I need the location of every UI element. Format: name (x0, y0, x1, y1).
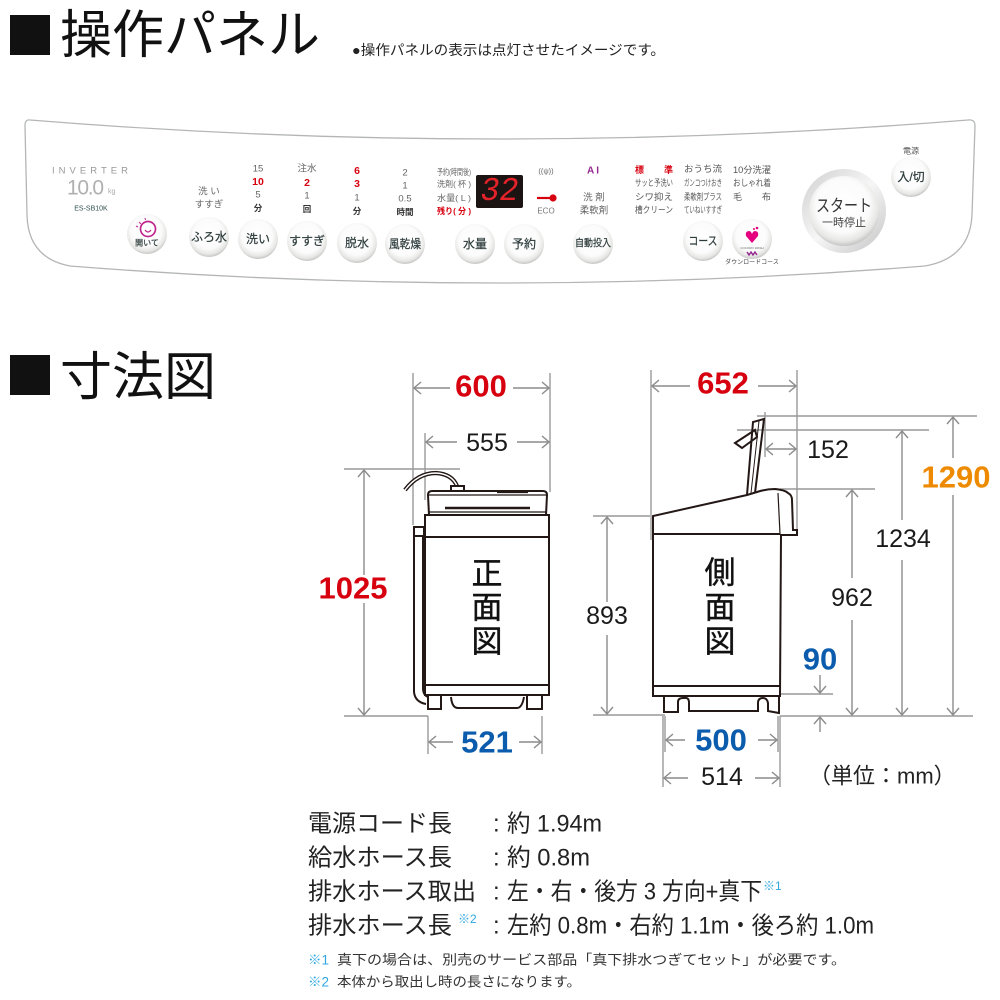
icon: wifi and eco key: ECO (537, 206, 555, 216)
spec: drain outlet: 排水ホース取出 (308, 878, 476, 906)
icon: wifi and eco key (537, 166, 557, 216)
button: コース (683, 221, 723, 261)
footnote 2: ※2 (308, 974, 329, 990)
button: download course (725, 219, 779, 266)
dimension: 521 (428, 716, 542, 760)
dimension: 652 (651, 366, 797, 540)
wash labels column: 10 (252, 176, 264, 188)
dimension: 1234: 1234 (875, 525, 931, 553)
wash labels column: 15 (253, 164, 263, 174)
model info (52, 166, 128, 212)
dimension: 1025: 1025 (319, 570, 387, 606)
button: 予約 (504, 224, 544, 264)
dimension: 555 (425, 429, 549, 500)
button: 開いて: 開いて (135, 238, 159, 248)
diagram: side view (586, 366, 990, 791)
button: 自動投入 (573, 224, 613, 264)
washer front drawing: 図 (472, 624, 502, 660)
wash labels column: 1 (402, 180, 408, 192)
button: 電源 入/切: 入/切 (897, 170, 925, 184)
diagram: front view (319, 368, 550, 760)
button: 風乾燥: 風乾燥 (389, 237, 421, 251)
display labels: 予約(時間後) (437, 167, 471, 177)
dimension: 500 (665, 716, 778, 758)
note: panel display: ●操作パネルの表示は点灯させたイメージです。 (352, 42, 665, 58)
spec: drain outlet: ※1 (763, 879, 782, 893)
spec: water hose: 約 0.8m (507, 844, 590, 872)
course labels: シワ抑え (635, 191, 673, 202)
button: 洗い: 洗い (246, 232, 270, 246)
button: スタート: 一時停止 (822, 216, 866, 229)
course labels: 槽クリーン (635, 204, 673, 215)
wash labels column: 回 (303, 204, 311, 214)
AI labels (580, 166, 608, 216)
spec: drain outlet: : (493, 878, 500, 906)
dimension: 90 (780, 642, 837, 732)
washer front drawing (405, 473, 549, 709)
wash labels column: 5 (255, 190, 261, 200)
button: download course: ダウンロードコース (725, 258, 779, 266)
spec: power cord: : (493, 810, 500, 838)
button: 脱水 (337, 223, 377, 263)
spec: drain outlet (308, 878, 782, 906)
wash labels column: 3 (354, 178, 360, 190)
dimension: 90: 90 (803, 642, 837, 676)
dimension: 893: 893 (586, 602, 628, 630)
dimension: 893 (586, 516, 665, 715)
wash labels column: 2 (304, 177, 310, 189)
footnote 2: 本体から取出し時の長さになります。 (337, 974, 581, 990)
display labels (437, 167, 471, 216)
spec: power cord (308, 810, 602, 838)
button: download course: COCORO WASH (740, 246, 764, 250)
washer front drawing: 正 (472, 556, 502, 592)
washer side drawing: 図 (704, 624, 736, 660)
washer front drawing: 面 (472, 590, 502, 626)
wash labels column (195, 162, 414, 217)
dimension: 152 (765, 412, 849, 464)
AI labels: 柔軟剤 (580, 204, 608, 216)
dimension: 514 (663, 716, 780, 791)
spec: drain outlet: 左・右・後方 3 方向+真下 (507, 878, 762, 906)
display labels: 洗剤( 杯 ) (437, 179, 471, 189)
spec: drain hose length: ※2 (458, 912, 477, 926)
dimension: 1025 (319, 469, 460, 716)
button: 水量: 水量 (463, 237, 487, 251)
spec: water hose (308, 844, 590, 872)
dimension: 521: 521 (461, 724, 513, 760)
dimension: 1290: 1290 (922, 460, 990, 494)
washer side drawing (653, 419, 797, 713)
button: スタート: スタート (816, 196, 872, 216)
wash labels column: 6 (354, 165, 360, 177)
spec: water hose: : (493, 844, 500, 872)
dimension: 1290 (757, 416, 990, 716)
button: すすぎ: すすぎ (289, 234, 325, 248)
footnote 1: ※1 (308, 952, 329, 968)
button: ふろ水: ふろ水 (191, 230, 227, 244)
button: ふろ水 (189, 217, 229, 257)
dimension: 600 (413, 368, 550, 525)
button: すすぎ (287, 221, 327, 261)
course labels: 柔軟剤プラス (684, 191, 722, 202)
wash labels column: 1 (354, 192, 360, 204)
button: 開いて (127, 214, 167, 254)
spec: drain hose length: 左約 0.8m・右約 1.1m・後ろ約 1.0m (507, 912, 874, 940)
wash labels column: 洗 い (198, 186, 220, 198)
button: 風乾燥 (385, 224, 425, 264)
model info: kg (108, 188, 116, 196)
button: 水量 (455, 224, 495, 264)
spec: drain hose length (308, 912, 874, 940)
unit label: （単位：mm） (809, 764, 956, 788)
dimension: 152: 152 (807, 436, 849, 464)
panel outline (25, 120, 975, 283)
dimension: 500: 500 (695, 722, 747, 758)
course labels: 10分洗濯 (733, 164, 771, 175)
spec list (308, 810, 874, 990)
spec: water hose: 給水ホース長 (308, 844, 452, 872)
icon: wifi and eco key: ((ψ)) (538, 166, 554, 176)
spec: power cord: 約 1.94m (507, 810, 602, 838)
washer side drawing: 面 (704, 590, 736, 626)
heading: 寸法図: 寸法図 (60, 349, 216, 407)
washer side drawing: 側 (704, 556, 736, 590)
course labels (635, 163, 771, 215)
course labels: 標 準 (635, 164, 673, 175)
model info: ES-SB10K (74, 206, 108, 212)
button: 自動投入: 自動投入 (575, 236, 611, 250)
spec: power cord: 電源コード長 (308, 810, 452, 838)
footnote 1: 真下の場合は、別売のサービス部品「真下排水つぎてセット」が必要です。 (337, 952, 846, 968)
button: 予約: 予約 (512, 236, 536, 251)
wash labels column: 1 (304, 190, 310, 202)
LED display: 32 (480, 173, 518, 210)
course labels: サッと予洗い (635, 177, 673, 188)
dimension: 652: 652 (697, 366, 749, 400)
button: 脱水: 脱水 (345, 235, 369, 250)
course labels: ガンコつけおき (684, 178, 722, 188)
spec: drain hose length: 排水ホース長 (308, 912, 452, 940)
display labels: 残り( 分 ) (437, 206, 471, 216)
course labels: ていねいすすぎ (684, 204, 722, 215)
display labels: 水量( L ) (437, 193, 471, 203)
heading: 操作パネル: 操作パネル (60, 7, 320, 65)
button: 電源 入/切: 電源 (903, 146, 919, 156)
AI labels: AI (587, 166, 601, 176)
wash labels column: すすぎ (195, 198, 224, 210)
button: スタート (802, 169, 886, 253)
wash labels column: 時間 (396, 207, 414, 217)
wash labels column: 2 (402, 168, 408, 178)
button: 電源 入/切 (891, 146, 931, 197)
course labels: おしゃれ着 (733, 177, 771, 188)
dimension: 600: 600 (455, 368, 507, 404)
wash labels column: 分 (353, 206, 362, 216)
course labels: 毛 布 (733, 191, 771, 202)
model info: 10.0 (67, 176, 104, 200)
button: コース: コース (688, 234, 718, 248)
wash labels column: 0.5 (398, 194, 412, 204)
panel: control panel (25, 120, 975, 283)
button: 洗い (238, 219, 278, 259)
dimension: 555: 555 (466, 429, 508, 457)
wash labels column: 注水 (297, 162, 317, 174)
spec: drain hose length: : (493, 912, 500, 940)
wash labels column: 分 (254, 203, 263, 213)
course labels: おうち流 (684, 163, 722, 174)
model info: INVERTER (52, 166, 128, 176)
AI labels: 洗 剤 (583, 192, 605, 204)
dimension: 962: 962 (831, 584, 873, 612)
dimension: 514: 514 (701, 763, 743, 791)
